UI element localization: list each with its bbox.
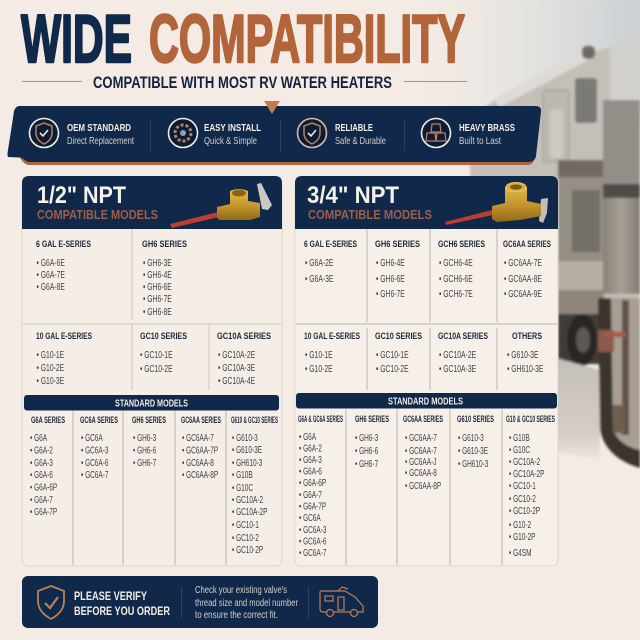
column: 10 gal E-series 3/4: • G10-1E [305, 349, 333, 360]
column: GCH6 series: GCH6 SERIES [438, 239, 485, 250]
column: G6A and GC6A series: • G6A [299, 431, 316, 442]
column: G6A and GC6A series [298, 414, 343, 558]
column: GC10 series: • GC10-2E [140, 363, 173, 374]
column: GCH6 series: • GCH6-7E [439, 288, 473, 299]
icon: reliable shield [298, 118, 326, 148]
column: 10 gal E-series 3/4: 10 GAL E-SERIES [304, 331, 360, 342]
column: GCH6 series: • GCH6-4E [439, 257, 473, 268]
column: GH6 series: • GH6-4E [143, 269, 172, 280]
column: G610 series: • G610-3 [458, 432, 484, 443]
feature: easy install: Quick & Simple [204, 135, 257, 147]
column: GC6A series [80, 415, 118, 480]
column: GC6AA series 3/4: • GC6AA-8E [504, 273, 542, 284]
column: GH6 series standard: • GH6-3 [133, 432, 156, 443]
column: G6A and GC6A series: • G6A-2 [299, 442, 322, 454]
column: GCH6 series: • GCH6-6E [439, 273, 473, 284]
column: 6 gal E-series: • G6A-6E [36, 257, 65, 268]
column: GC10A series: • GC10A-2E [218, 349, 255, 360]
column: GC6AA series 3/4: • GC6AA-9E [504, 288, 542, 299]
column: GC6AA series standard 3/4: • GC6AA-J [405, 456, 436, 467]
column: GC10A series 3/4: • GC10A-2E [439, 349, 476, 360]
column: GC10 series 3/4 [375, 331, 422, 374]
column: G6A and GC6A series: • G6A-7P [299, 500, 326, 512]
column: G610 and GC10 series: • G10C [232, 482, 253, 493]
column: others [507, 331, 544, 374]
feature: OEM standard: OEM STANDARD [67, 122, 131, 134]
column: 10 gal E-series: • G10-3E [36, 375, 64, 386]
callout: please verify: PLEASE VERIFY [74, 589, 147, 603]
standard models bar 3/4: STANDARD MODELS [388, 396, 463, 408]
heading: 1/2 inch NPT: 1/2" NPT [37, 182, 126, 209]
column: G6A and GC6A series: • GC6A [299, 512, 321, 523]
column: GH6 series 3/4: GH6 SERIES [375, 239, 420, 250]
column: G610 and GC10 series: • G10B [232, 469, 253, 480]
column: GC10A series: GC10A SERIES [217, 331, 271, 342]
panel: 1/2 inch NPT: COMPATIBLE MODELS [37, 207, 158, 222]
column: GC10A series: • GC10A-3E [218, 362, 255, 373]
column: G610 and GC10 series: • GC10-2 [232, 532, 259, 543]
column: G6A series [30, 415, 65, 517]
column: GC6AA series: • GC6AA-8 [182, 457, 214, 468]
column: 10 gal E-series [36, 331, 92, 386]
column: G6A series: • G6A-2 [30, 444, 53, 456]
column: G610 series: • G610-3E [458, 445, 488, 456]
feature: OEM standard [67, 122, 134, 147]
column: GC6A series: • GC6A-7 [81, 469, 109, 480]
column: G10 and GC10 series: • G10C [509, 444, 530, 455]
column: 6 gal E-series 3/4 [304, 239, 357, 284]
icon: gear [168, 118, 198, 148]
column: G610 and GC10 series: • GC10-1 [232, 519, 259, 530]
column: GC6AA series standard 3/4: • GC6AA-8 [405, 467, 437, 478]
column: G6A and GC6A series: • G6A-3 [299, 454, 322, 465]
column: others: • GH610-3E [507, 363, 544, 374]
column: 10 gal E-series: 10 GAL E-SERIES [36, 331, 92, 342]
column: GC6AA series standard 3/4: GC6AA SERIES [403, 414, 443, 425]
column: G10 and GC10 series: G10 & GC10 SERIES [506, 414, 555, 425]
column: G6A series: G6A SERIES [31, 415, 65, 426]
column: GC10 series 3/4: GC10 SERIES [375, 331, 422, 342]
column: G6A series: • G6A-7P [30, 506, 57, 517]
column: GC6AA series: • GC6AA-7P [182, 444, 218, 456]
column: G610 and GC10 series: • G610-3E [232, 444, 262, 455]
column: 6 gal E-series 3/4: 6 GAL E-SERIES [304, 239, 357, 250]
feature: heavy brass [459, 122, 515, 147]
icon: verify shield [38, 586, 64, 619]
column: G10 and GC10 series: • GC10A-2P [509, 468, 545, 479]
column: GH6 series standard: • GH6-6 [133, 444, 156, 456]
subtitle: COMPATIBLE WITH MOST RV WATER HEATERS [93, 73, 392, 92]
column: G10 and GC10 series: • GC10A-2 [509, 456, 540, 467]
standard models bar 3/4 [296, 393, 557, 408]
column: GC10A series [217, 331, 271, 386]
column: GC10A series: • GC10A-4E [218, 375, 255, 386]
column: G610 and GC10 series: • GC10-2P [232, 544, 263, 555]
column: GC6A series: • GC6A [81, 432, 103, 443]
column: 10 gal E-series 3/4: • G10-2E [305, 363, 333, 374]
column: GH6 series standard 3/4: • GH6-7 [355, 458, 378, 469]
column: GH6 series 3/4 [375, 239, 420, 299]
column: G10 and GC10 series: • G10-2P [509, 531, 536, 542]
column: GC10 series: • GC10-1E [140, 349, 173, 360]
column: G6A series: • G6A-7 [30, 494, 53, 505]
callout: please verify: thread size and model number [195, 598, 299, 609]
column: G6A and GC6A series: • GC6A-7 [299, 547, 327, 558]
column: 10 gal E-series: • G10-1E [36, 349, 64, 360]
column: 6 gal E-series: • G6A-7E [36, 269, 65, 280]
column: GC10 series 3/4: • GC10-1E [376, 349, 409, 360]
feature: reliable [335, 122, 386, 147]
column: GC6AA series 3/4: • GC6AA-7E [504, 257, 542, 268]
column: GC6A series: • GC6A-3 [81, 444, 109, 456]
feature: easy install [204, 122, 261, 147]
icon: RV [320, 587, 363, 616]
column: G10 and GC10 series: • G4SM [509, 547, 531, 558]
column: GC6AA series: • GC6AA-7 [182, 432, 214, 443]
column: GH6 series standard 3/4: • GH6-3 [355, 432, 378, 443]
column: GCH6 series [438, 239, 485, 299]
column: G6A and GC6A series: • G6A-6 [299, 465, 322, 477]
column: GH6 series: • GH6-8E [143, 306, 172, 317]
column: 6 gal E-series 3/4: • G6A-3E [305, 273, 334, 284]
heading: 3/4 inch NPT: 3/4" NPT [307, 182, 399, 209]
column: GC10A series 3/4 [438, 331, 488, 374]
column: G6A and GC6A series: • G6A-7 [299, 489, 322, 500]
column: G6A and GC6A series: • GC6A-6 [299, 535, 327, 547]
column: GC6AA series standard 3/4 [403, 414, 443, 491]
column: GC10A series 3/4: GC10A SERIES [438, 331, 488, 342]
column: 10 gal E-series 3/4 [304, 331, 360, 374]
column: G6A series: • G6A-3 [30, 457, 53, 468]
column: G610 and GC10 series [231, 415, 278, 555]
feature: OEM standard: Direct Replacement [67, 135, 134, 147]
feature: reliable: Safe & Durable [335, 135, 386, 147]
column: GH6 series 3/4: • GH6-4E [376, 257, 405, 268]
column: GC6A series: • GC6A-6 [81, 457, 109, 468]
column: 10 gal E-series: • G10-2E [36, 362, 64, 373]
column: G10 and GC10 series: • GC10-2 [509, 493, 536, 504]
callout: please verify: Check your existing valve's [195, 585, 287, 596]
column: G6A series: • G6A-6 [30, 469, 53, 480]
column: G10 and GC10 series [506, 414, 555, 558]
title [21, 1, 465, 77]
column: GC10 series 3/4: • GC10-2E [376, 363, 409, 374]
column: GC6AA series [181, 415, 221, 480]
column: GC6AA series: • GC6AA-8P [182, 469, 218, 480]
panel: 3/4 inch NPT: G6A & GC6A SERIES [298, 414, 343, 425]
column: GC6AA series standard 3/4: • GC6AA-7 [405, 432, 437, 443]
column: G610 and GC10 series: • G610-3 [232, 432, 258, 443]
column: G610 and GC10 series: • GC10A-2P [232, 506, 268, 517]
column: GH6 series: • GH6-7E [143, 293, 172, 304]
column: GC6AA series standard 3/4: • GC6AA-8P [405, 480, 441, 491]
column: GC6AA series 3/4: GC6AA SERIES [503, 239, 551, 250]
feature: heavy brass: Built to Last [459, 135, 501, 147]
column: GH6 series standard 3/4 [355, 414, 389, 469]
column: G610 and GC10 series: • GC10A-2 [232, 494, 263, 505]
panel: 3/4 inch NPT [295, 176, 558, 566]
column: GH6 series standard 3/4: GH6 SERIES [355, 414, 389, 425]
feature: reliable: RELIABLE [335, 122, 373, 134]
column: GC6AA series standard 3/4: • GC6AA-7 [405, 445, 437, 456]
feature banner [8, 101, 541, 165]
column: GC10A series 3/4: • GC10A-3E [439, 363, 476, 374]
column: G10 and GC10 series: • GC10-1 [509, 480, 536, 491]
column: GH6 series: • GH6-3E [143, 257, 172, 268]
panel: 1/2 inch NPT: G610 & GC10 SERIES [231, 415, 278, 426]
column: 6 gal E-series [36, 239, 91, 292]
column: G610 and GC10 series: • GH610-3 [232, 457, 263, 468]
panel: 3/4 inch NPT: COMPATIBLE MODELS [308, 207, 432, 222]
callout: please verify [22, 576, 378, 628]
column: GH6 series 3/4: • GH6-6E [376, 273, 405, 284]
column: GH6 series [142, 239, 187, 317]
standard models bar [24, 395, 279, 410]
column: G10 and GC10 series: • G10B [509, 432, 530, 443]
panel: 1/2 inch NPT [22, 176, 282, 566]
column: others: • G610-3E [507, 349, 539, 360]
column: GH6 series standard 3/4: • GH6-6 [355, 445, 378, 456]
icon: OEM shield [30, 118, 58, 148]
column: G6A series: • G6A-6P [30, 481, 57, 493]
column: 6 gal E-series: • G6A-8E [36, 281, 65, 292]
column: GH6 series 3/4: • GH6-7E [376, 288, 405, 299]
column: GH6 series: • GH6-6E [143, 281, 172, 292]
column: GC10 series: GC10 SERIES [140, 331, 187, 342]
column: 6 gal E-series 3/4: • G6A-2E [305, 257, 334, 268]
callout: please verify: to ensure the correct fit. [195, 610, 278, 621]
column: GH6 series standard: • GH6-7 [133, 457, 156, 468]
icon: half inch brass valve [170, 183, 272, 228]
column: G10 and GC10 series: • G10-2 [509, 519, 531, 530]
column: GH6 series standard [132, 415, 166, 468]
column: GH6 series standard: GH6 SERIES [132, 415, 166, 426]
column: GC10 series [140, 331, 187, 374]
column: G610 series: G610 SERIES [457, 414, 494, 425]
callout: please verify: BEFORE YOU ORDER [74, 604, 170, 618]
column: G6A and GC6A series: • G6A-6P [299, 477, 326, 488]
column: G6A and GC6A series: • GC6A-3 [299, 524, 327, 535]
column: GC6A series: GC6A SERIES [80, 415, 118, 426]
icon: three-quarter inch brass valve [445, 182, 548, 225]
column: G10 and GC10 series: • GC10-2P [509, 505, 540, 516]
column: GC6AA series 3/4 [503, 239, 551, 299]
icon: brass blocks [422, 118, 450, 148]
column: others: OTHERS [512, 331, 542, 342]
column: 6 gal E-series: 6 GAL E-SERIES [36, 239, 91, 250]
column: G6A series: • G6A [30, 432, 47, 443]
column: GC6AA series: GC6AA SERIES [181, 415, 221, 426]
column: G610 series [457, 414, 494, 469]
standard models bar: STANDARD MODELS [115, 398, 188, 410]
feature: easy install: EASY INSTALL [204, 122, 261, 134]
feature: heavy brass: HEAVY BRASS [459, 122, 515, 134]
title: WIDE [21, 1, 132, 77]
column: G610 series: • GH610-3 [458, 458, 489, 469]
column: GH6 series: GH6 SERIES [142, 239, 187, 250]
